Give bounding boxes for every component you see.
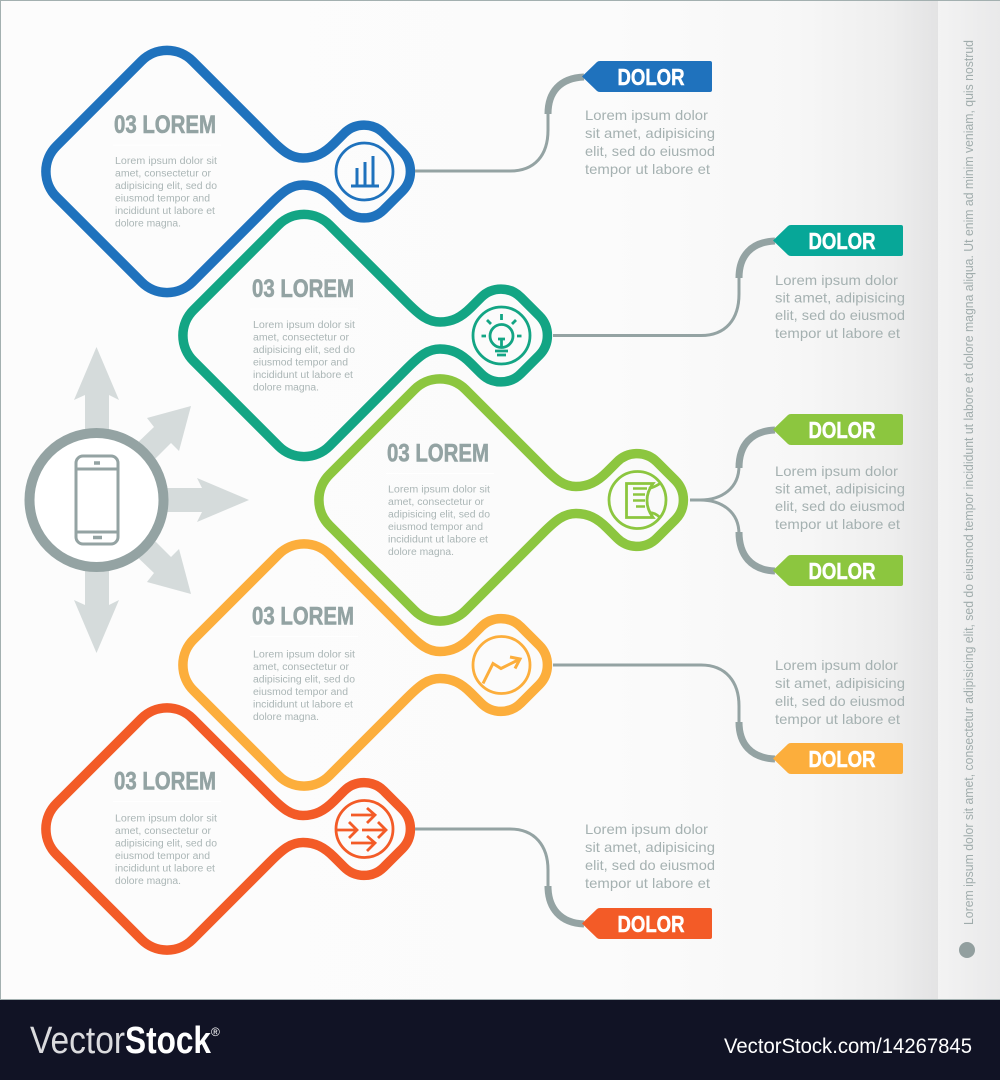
tag 5 bbox=[582, 908, 712, 939]
footer bar bbox=[0, 1000, 1000, 1080]
body text: adipisicing elit, sed do bbox=[253, 345, 355, 356]
tag 3a: DOLOR bbox=[808, 417, 876, 443]
tag 5: DOLOR bbox=[618, 911, 685, 937]
connector 4 bbox=[553, 665, 775, 759]
body text: amet, consectetur or bbox=[253, 662, 350, 673]
body text: Lorem ipsum dolor sit bbox=[388, 484, 490, 496]
side panel dot bbox=[959, 942, 975, 958]
tag 4: DOLOR bbox=[808, 746, 876, 772]
panel: item 2 teal bbox=[183, 214, 547, 457]
body text bbox=[388, 484, 490, 558]
text 4 bbox=[775, 657, 905, 727]
body text: amet, consectetur or bbox=[115, 826, 212, 837]
icon: light bulb bbox=[473, 307, 530, 364]
outline bbox=[183, 544, 547, 786]
connector 3 bbox=[690, 430, 775, 571]
text 5 bbox=[585, 821, 715, 891]
tag 3b bbox=[773, 555, 903, 586]
text 3: Lorem ipsum dolor bbox=[775, 463, 898, 479]
footer logo: ® bbox=[211, 1025, 220, 1039]
outline bbox=[46, 50, 410, 293]
panel: item 4 orange bbox=[183, 544, 547, 786]
body text: Lorem ipsum dolor sit bbox=[115, 156, 217, 167]
icon: smartphone bbox=[76, 456, 118, 544]
body text: eiusmod tempor and bbox=[388, 522, 483, 533]
text 2: tempor ut labore et bbox=[775, 325, 900, 341]
body text: amet, consectetur or bbox=[115, 168, 212, 180]
body text: dolore magna. bbox=[253, 382, 319, 394]
heading: 03 LOREM bbox=[114, 111, 216, 139]
text 2: elit, sed do eiusmod bbox=[775, 307, 905, 323]
body text: adipisicing elit, sed do bbox=[388, 510, 490, 520]
text 2: sit amet, adipisicing bbox=[775, 290, 905, 306]
body text: dolore magna. bbox=[253, 712, 319, 723]
body text: Lorem ipsum dolor sit bbox=[115, 814, 217, 824]
icon: trend arrow bbox=[473, 636, 530, 694]
heading: 03 LOREM bbox=[252, 275, 354, 303]
text 1: sit amet, adipisicing bbox=[585, 125, 715, 141]
text 3 bbox=[775, 463, 905, 532]
outline bbox=[319, 379, 683, 621]
body text: dolore magna. bbox=[115, 218, 181, 230]
side panel bbox=[938, 0, 1000, 1000]
central phone hub with arrows bbox=[30, 347, 249, 653]
text 3: elit, sed do eiusmod bbox=[775, 498, 905, 514]
text 4: elit, sed do eiusmod bbox=[775, 693, 905, 709]
text 2 bbox=[775, 272, 905, 341]
outline bbox=[183, 214, 547, 457]
text 1: Lorem ipsum dolor bbox=[585, 107, 708, 123]
body text: adipisicing elit, sed do bbox=[253, 674, 355, 686]
body text: eiusmod tempor and bbox=[115, 851, 210, 862]
side panel vertical text: Lorem ipsum dolor sit amet, consectetur adipisicing elit, sed do eiusmod tempor incididunt ut labore et dolore magna aliqua. Ut enim ad minim veniam, quis nostrud bbox=[961, 40, 976, 925]
body text: incididunt ut labore et bbox=[388, 534, 488, 546]
tag 3b: DOLOR bbox=[808, 558, 876, 584]
footer logo: Vector bbox=[30, 1020, 125, 1062]
body text: amet, consectetur or bbox=[253, 332, 350, 344]
icon: bar chart bbox=[336, 143, 393, 200]
body text: incididunt ut labore et bbox=[253, 370, 353, 381]
text 4: Lorem ipsum dolor bbox=[775, 657, 898, 673]
text 5: Lorem ipsum dolor bbox=[585, 821, 708, 837]
body text: eiusmod tempor and bbox=[115, 194, 210, 204]
text 4: sit amet, adipisicing bbox=[775, 675, 905, 691]
body text: dolore magna. bbox=[115, 876, 181, 887]
heading: 03 LOREM bbox=[252, 602, 354, 630]
tag 2 bbox=[773, 225, 903, 256]
body text bbox=[253, 650, 355, 723]
tag 1 bbox=[582, 61, 712, 92]
body text: Lorem ipsum dolor sit bbox=[253, 320, 355, 331]
connector 1 bbox=[415, 77, 584, 171]
hub circle bbox=[30, 433, 164, 567]
footer image id: VectorStock.com/14267845 bbox=[724, 1035, 972, 1058]
tag 1: DOLOR bbox=[618, 64, 685, 90]
text 2: Lorem ipsum dolor bbox=[775, 272, 898, 288]
connector 5 bbox=[415, 829, 584, 924]
tag 3a bbox=[773, 414, 903, 445]
body text: amet, consectetur or bbox=[388, 497, 485, 508]
connector 2 bbox=[553, 241, 775, 336]
body text bbox=[115, 156, 217, 230]
body text: adipisicing elit, sed do bbox=[115, 181, 217, 192]
body text: adipisicing elit, sed do bbox=[115, 838, 217, 850]
panel: item 5 red bbox=[46, 708, 410, 950]
footer logo bbox=[30, 1020, 220, 1062]
body text: Lorem ipsum dolor sit bbox=[253, 650, 355, 660]
body text: dolore magna. bbox=[388, 547, 454, 558]
text 5: elit, sed do eiusmod bbox=[585, 857, 715, 873]
text 3: tempor ut labore et bbox=[775, 516, 900, 532]
outline bbox=[46, 708, 410, 950]
panel: item 1 blue bbox=[46, 50, 410, 293]
text 5: tempor ut labore et bbox=[585, 875, 710, 891]
tag 2: DOLOR bbox=[808, 228, 876, 254]
arrows radiating from phone bbox=[74, 347, 249, 653]
body text bbox=[115, 814, 217, 887]
text 1 bbox=[585, 107, 715, 177]
body text: eiusmod tempor and bbox=[253, 358, 348, 368]
text 1: elit, sed do eiusmod bbox=[585, 143, 715, 159]
text 3: sit amet, adipisicing bbox=[775, 480, 905, 496]
body text: eiusmod tempor and bbox=[253, 687, 348, 698]
body text bbox=[253, 320, 355, 394]
text 1: tempor ut labore et bbox=[585, 161, 710, 177]
text 5: sit amet, adipisicing bbox=[585, 839, 715, 855]
panel: item 3 lime bbox=[319, 379, 683, 621]
heading: 03 LOREM bbox=[387, 440, 489, 468]
heading: 03 LOREM bbox=[114, 768, 216, 796]
body text: incididunt ut labore et bbox=[253, 700, 353, 710]
icon: document bbox=[609, 472, 666, 528]
body text: incididunt ut labore et bbox=[115, 864, 215, 874]
icon: arrows bbox=[336, 800, 393, 858]
text 4: tempor ut labore et bbox=[775, 711, 900, 727]
tag 4 bbox=[773, 743, 903, 774]
footer logo: Stock bbox=[125, 1020, 212, 1062]
body text: incididunt ut labore et bbox=[115, 206, 215, 217]
